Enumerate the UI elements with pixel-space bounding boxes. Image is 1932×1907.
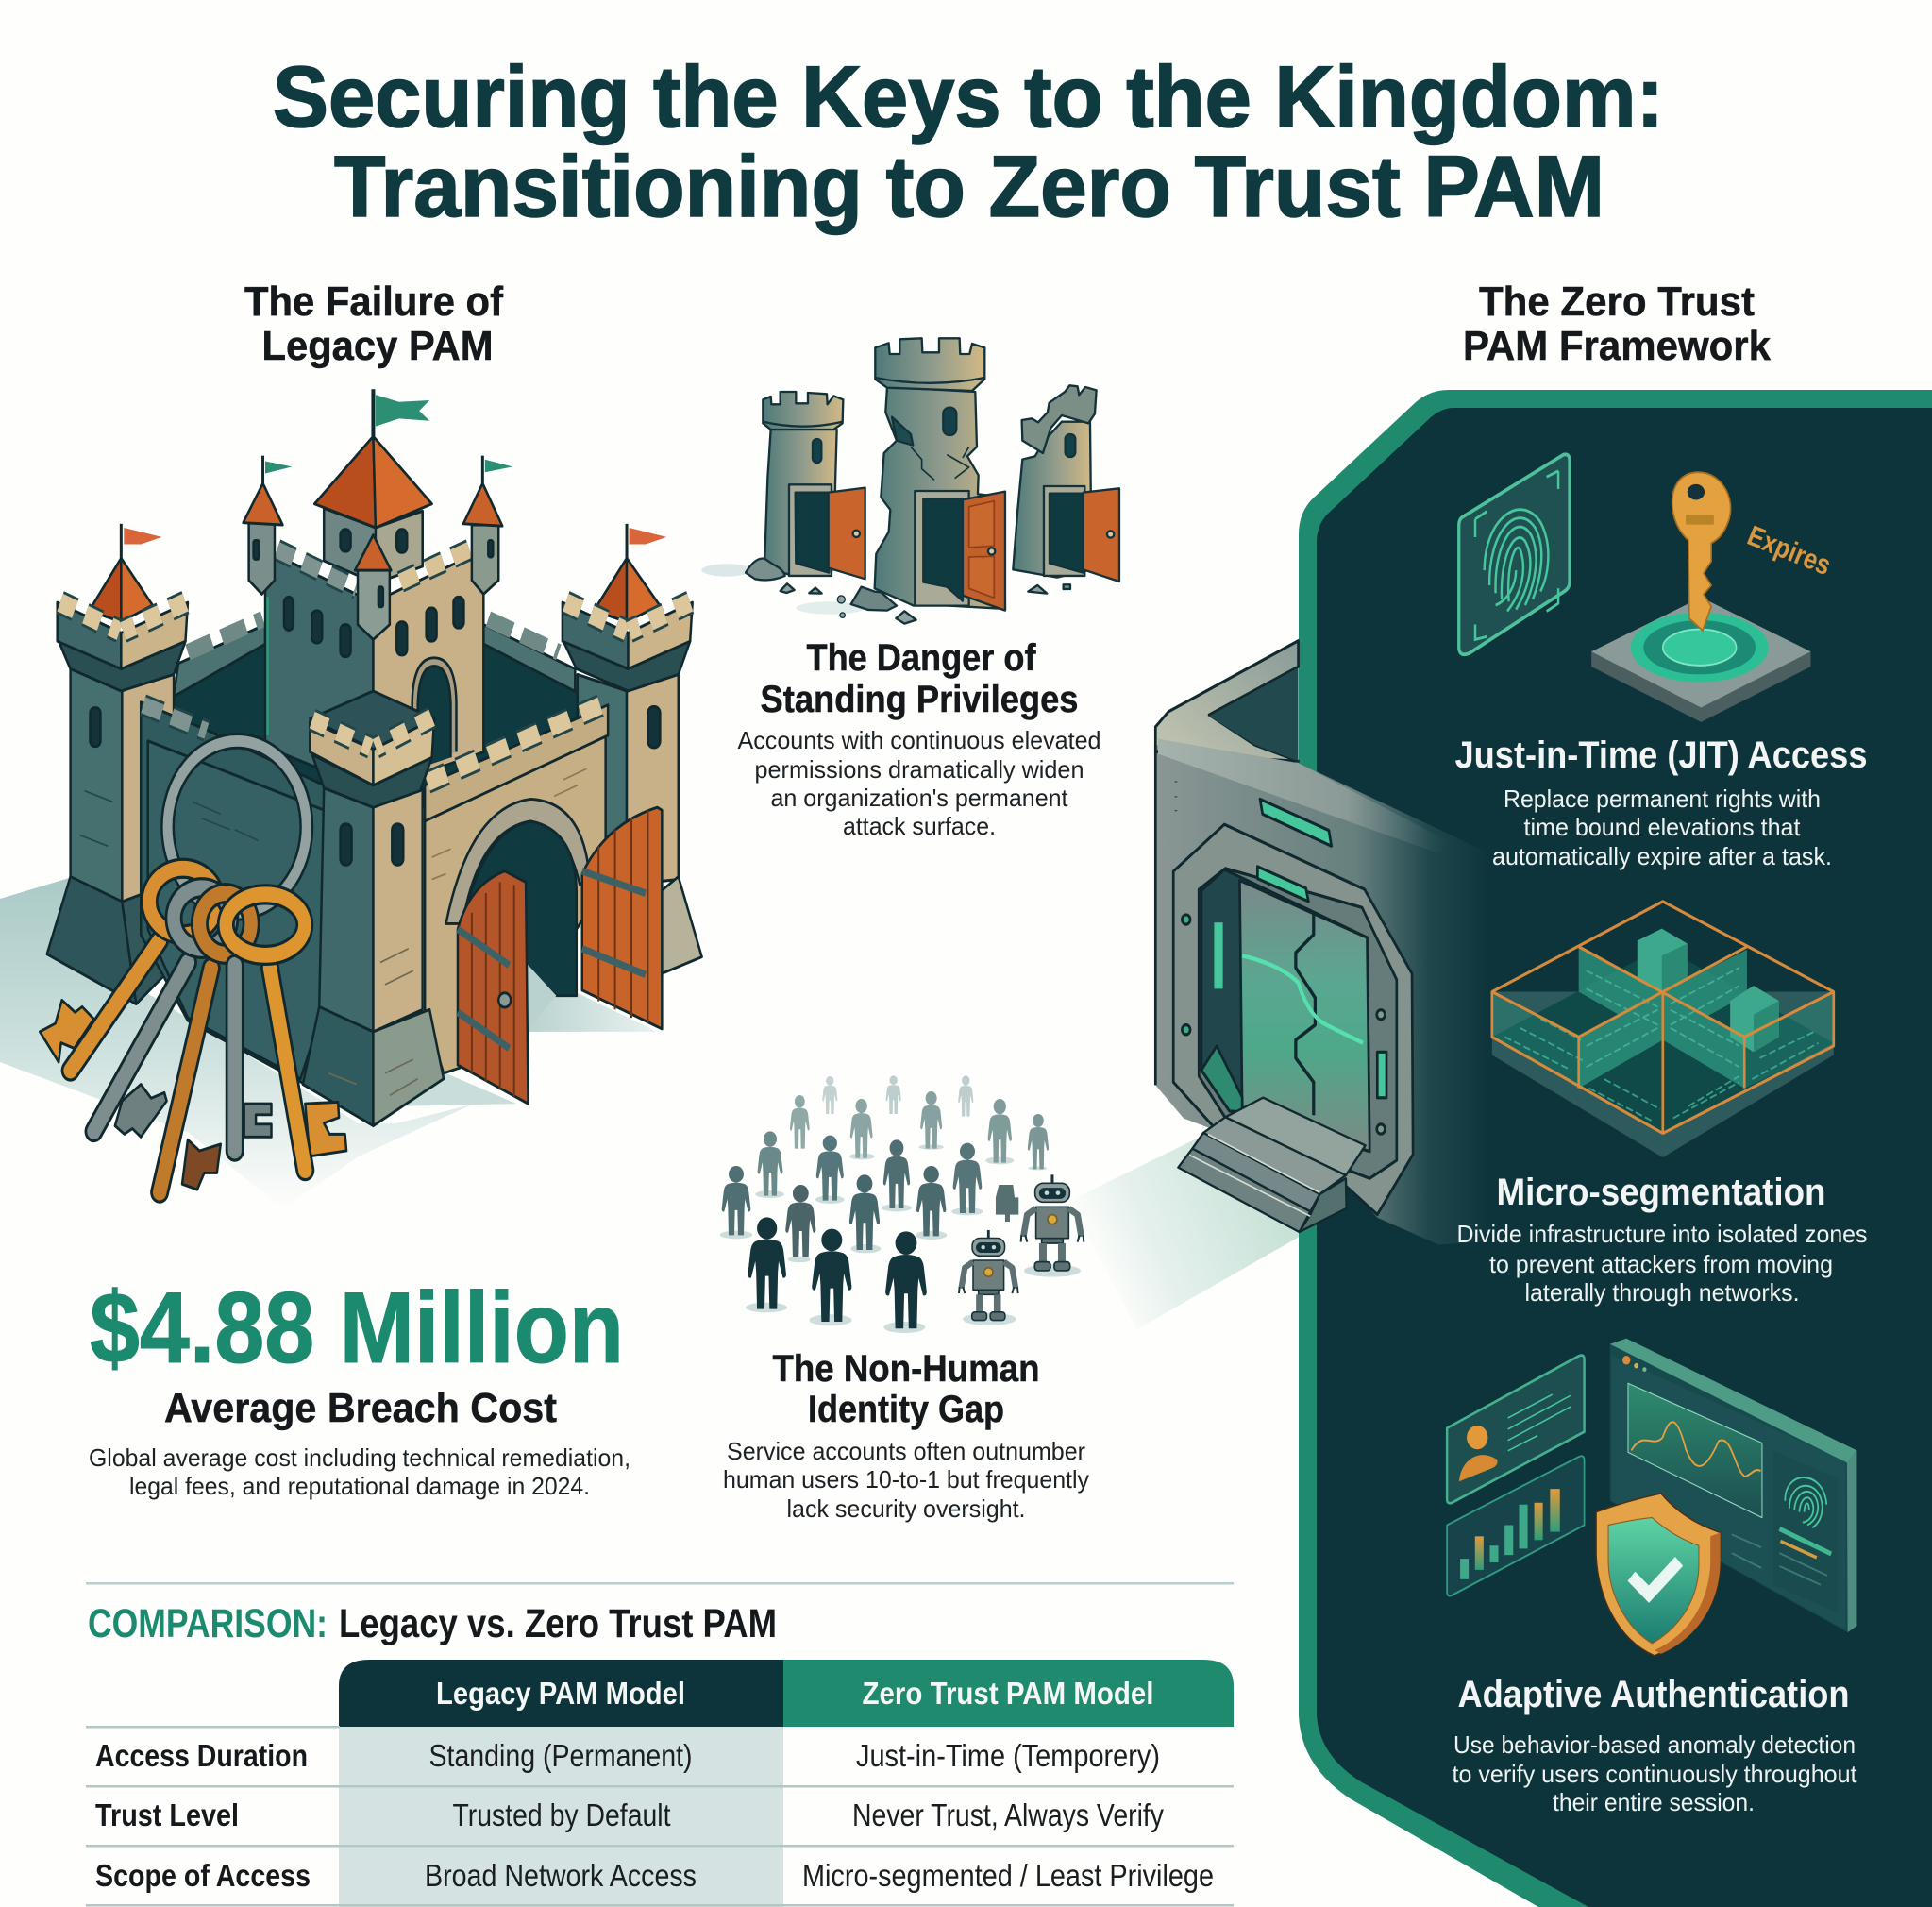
mesh — [1504, 968, 1819, 1122]
comparison heading — [88, 1601, 777, 1646]
courtyard and rear walls — [174, 619, 580, 807]
illustration: crumbling towers with open doors — [701, 338, 1119, 624]
text block: non-human identity gap: The Non-Human — [772, 1348, 1040, 1390]
heading: the zero trust PAM framework: PAM Framework — [1463, 323, 1771, 369]
table header: legacy: Legacy PAM Model — [436, 1676, 685, 1711]
row: access duration: Standing (Permanent) — [428, 1738, 693, 1773]
central keep — [265, 389, 483, 791]
text block: JIT access: automatically expire after a task. — [1492, 842, 1832, 870]
bar chart card — [1447, 1456, 1585, 1595]
row: scope of access: Scope of Access — [95, 1858, 311, 1893]
right tower — [563, 524, 702, 973]
statistic: breach cost: $4.88 Million — [90, 1271, 624, 1384]
text block: JIT access: Replace permanent rights with — [1504, 785, 1821, 813]
row: access duration: Just-in-Time (Temporery) — [856, 1738, 1160, 1773]
left tower — [746, 392, 865, 594]
housing — [1155, 745, 1489, 1244]
row: trust level: Trust Level — [95, 1797, 239, 1832]
heading: the failure of legacy PAM — [244, 278, 503, 369]
front left wall — [80, 702, 324, 1085]
lights and rivets — [1176, 781, 1386, 1134]
front tower — [303, 691, 444, 1126]
text block: adaptive authentication: Use behavior-based anomaly detection — [1453, 1730, 1856, 1759]
comparison section rule — [86, 1582, 1234, 1584]
text block: danger of standing privileges — [738, 637, 1100, 840]
title — [273, 49, 1664, 235]
table header: zero trust: Zero Trust PAM Model — [863, 1676, 1153, 1711]
zone cubes — [1638, 929, 1779, 1052]
partial figure — [996, 1185, 1018, 1222]
icon: micro-segmented network — [1492, 902, 1834, 1157]
row: scope of access: Broad Network Access — [425, 1858, 697, 1893]
text block: adaptive authentication — [1452, 1674, 1857, 1816]
row: trust level: Never Trust, Always Verify — [852, 1797, 1164, 1832]
table header: zero trust — [783, 1660, 1234, 1727]
text block: JIT access: Just-in-Time (JIT) Access — [1455, 734, 1867, 776]
heading: the failure of legacy PAM: Legacy PAM — [262, 323, 493, 369]
keep turrets — [244, 456, 512, 639]
comparison table — [86, 1660, 1234, 1907]
text block: non-human identity gap: lack security oversight. — [787, 1494, 1025, 1523]
robot back — [1021, 1174, 1084, 1271]
text block: danger of standing privileges: permissions dramatically widen — [755, 755, 1084, 784]
door seam — [1296, 914, 1315, 1115]
heading: the zero trust PAM framework: The Zero Trust — [1479, 278, 1755, 325]
comparison heading: COMPARISON: — [88, 1601, 328, 1646]
text block: non-human identity gap: Identity Gap — [808, 1389, 1004, 1430]
title: Securing the Keys to the Kingdom: — [273, 49, 1664, 145]
statistic: breach cost: Average Breach Cost — [164, 1385, 557, 1431]
row: access duration — [95, 1738, 1160, 1773]
key ring — [168, 741, 307, 913]
text block: micro-segmentation: Micro-segmentation — [1497, 1172, 1825, 1213]
text block: danger of standing privileges: an organization's permanent — [770, 784, 1068, 812]
text block: micro-segmentation — [1457, 1172, 1867, 1307]
text block: non-human identity gap: Service accounts often outnumber — [727, 1437, 1085, 1465]
table header: legacy — [339, 1660, 783, 1727]
icon: fingerprint scanner — [1459, 454, 1570, 654]
title: Transitioning to Zero Trust PAM — [334, 139, 1604, 235]
text block: JIT access: time bound elevations that — [1523, 813, 1801, 841]
text block: non-human identity gap — [723, 1348, 1089, 1523]
row: scope of access: Micro-segmented / Least Privilege — [802, 1858, 1214, 1893]
frame — [1173, 824, 1413, 1215]
middle tower — [837, 338, 1005, 624]
text block: adaptive authentication: to verify users continuously throughout — [1452, 1760, 1857, 1788]
person figures — [722, 1075, 1049, 1328]
monitor — [1610, 1339, 1856, 1632]
vault door step — [1178, 1098, 1366, 1232]
statistic: breach cost — [89, 1271, 630, 1500]
robot front — [959, 1230, 1018, 1321]
text block: micro-segmentation: laterally through networks. — [1525, 1278, 1799, 1307]
profile card — [1447, 1356, 1585, 1503]
text block: danger of standing privileges: attack surface. — [843, 812, 996, 840]
text block: adaptive authentication: Adaptive Authentication — [1457, 1674, 1850, 1715]
right tower — [1013, 385, 1119, 594]
row: trust level — [95, 1797, 1164, 1832]
icon: adaptive authentication dashboard — [1447, 1339, 1856, 1656]
row: access duration: Access Duration — [95, 1738, 308, 1773]
text block: micro-segmentation: Divide infrastructure into isolated zones — [1457, 1220, 1867, 1248]
illustration: castle with keys — [40, 389, 702, 1192]
front right wall with gate — [425, 703, 608, 1073]
statistic: breach cost: Global average cost including technical remediation, — [89, 1443, 630, 1472]
panel: zero trust framework — [1299, 390, 1932, 1907]
statistic: breach cost: legal fees, and reputational damage in 2024. — [129, 1472, 590, 1500]
gate floor shadow — [526, 968, 657, 1032]
heading: the zero trust PAM framework — [1463, 278, 1771, 369]
illustration: vault door — [1155, 641, 1489, 1244]
illustration: crowd of identities and robots — [720, 1075, 1084, 1333]
text block: micro-segmentation: to prevent attackers from moving — [1489, 1250, 1833, 1278]
gate doors — [458, 807, 662, 1104]
label: expires: Expires — [1743, 520, 1835, 582]
floor shadow: castle — [0, 873, 472, 1208]
text block: danger of standing privileges: Accounts with continuous elevated — [738, 726, 1100, 754]
comparison heading: Legacy vs. Zero Trust PAM — [339, 1601, 777, 1646]
glow line — [1242, 955, 1363, 1043]
heading: the failure of legacy PAM: The Failure of — [244, 278, 503, 325]
text block: JIT access — [1455, 734, 1867, 870]
floor beam from vault door — [1069, 1138, 1302, 1329]
text block: non-human identity gap: human users 10-to-1 but frequently — [723, 1465, 1089, 1494]
shield — [1596, 1494, 1721, 1656]
partition walls — [1492, 947, 1834, 1089]
text block: danger of standing privileges: Standing Privileges — [761, 679, 1078, 720]
rim and interior — [1155, 641, 1299, 761]
icon: expiring key on pad — [1591, 472, 1810, 722]
keys — [40, 869, 346, 1192]
orange partitions — [1492, 902, 1834, 1133]
legacy column shading — [339, 1727, 783, 1907]
text block: adaptive authentication: their entire session. — [1553, 1788, 1755, 1816]
row: trust level: Trusted by Default — [453, 1797, 670, 1832]
text block: danger of standing privileges: The Danger of — [806, 637, 1036, 679]
row: scope of access — [95, 1858, 1214, 1893]
left tower — [47, 524, 188, 1004]
